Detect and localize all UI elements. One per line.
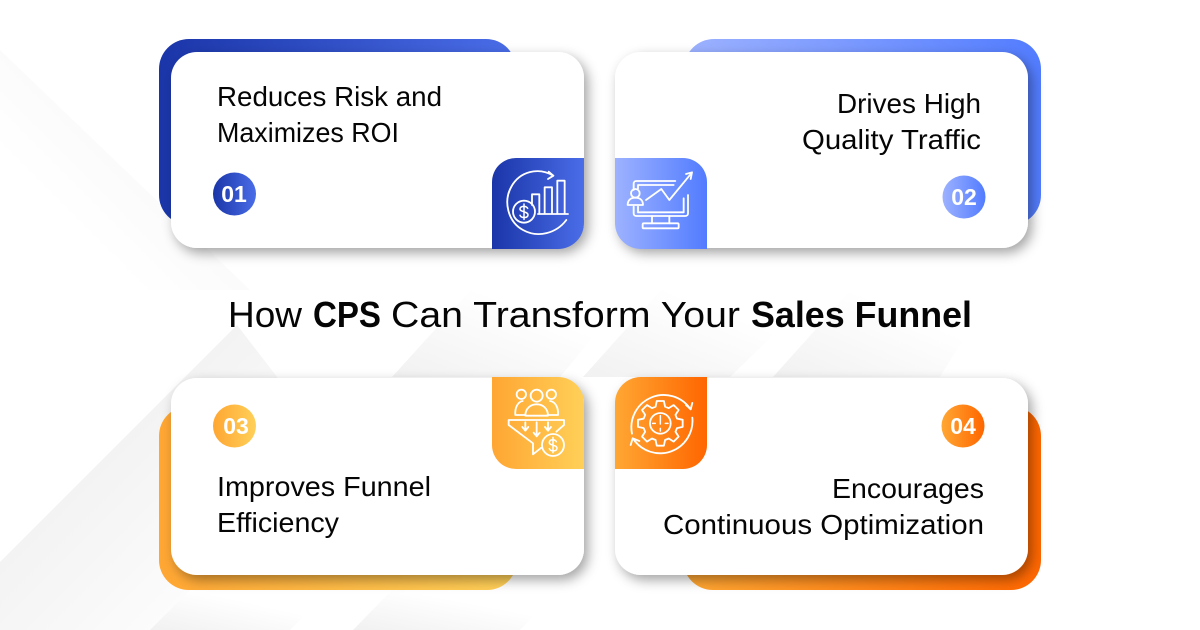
title: How xyxy=(228,294,303,335)
number badge 01: 01 xyxy=(221,181,247,207)
card 01 white panel xyxy=(171,52,584,248)
heading: card 01: Reduces Risk and xyxy=(217,81,442,112)
panel: card 02 high quality traffic xyxy=(615,39,1041,249)
icon: people entering funnel xyxy=(509,390,564,456)
heading: card 04 xyxy=(663,473,984,540)
heading: card 01: Maximizes ROI xyxy=(217,117,399,148)
card 02 backing shape xyxy=(684,39,1041,225)
title xyxy=(228,294,972,335)
heading: card 04: Continuous Optimization xyxy=(663,509,984,540)
number badge 03: 03 xyxy=(223,413,249,439)
card 02 icon tile xyxy=(615,158,707,249)
number badge 02: 02 xyxy=(951,184,977,210)
card 04 backing shape xyxy=(683,406,1041,590)
heading: card 04: Encourages xyxy=(832,473,984,504)
heading: card 03 xyxy=(217,471,431,538)
card 03 icon tile xyxy=(492,377,584,469)
card 01 backing shape xyxy=(159,39,516,225)
number badge 02 xyxy=(942,176,986,218)
title: CPS xyxy=(313,294,381,335)
panel: card 03 funnel efficiency xyxy=(159,377,584,590)
card 04 icon tile xyxy=(615,377,707,469)
heading: card 02: Quality Traffic xyxy=(802,124,981,155)
card 01 icon tile xyxy=(492,158,584,249)
number badge 03 xyxy=(213,404,256,448)
card 02 white panel xyxy=(615,52,1028,248)
icon: monitor with rising line xyxy=(628,172,692,228)
card 03 white panel xyxy=(171,378,584,575)
icon: gear with clock and cycle arrows xyxy=(631,395,692,453)
heading: card 03: Efficiency xyxy=(217,507,339,538)
title: Sales Funnel xyxy=(751,294,972,335)
icon: coin and growth bars xyxy=(507,171,568,234)
card 04 white panel xyxy=(615,378,1028,575)
panel: card 04 continuous optimization xyxy=(615,377,1041,590)
number badge 04 xyxy=(942,404,984,448)
number badge 04: 04 xyxy=(950,413,976,439)
heading: card 02: Drives High xyxy=(837,88,981,119)
title: Can Transform Your xyxy=(391,294,740,335)
panel: card 01 reduces risk xyxy=(159,39,584,249)
number badge 01 xyxy=(213,172,256,216)
heading: card 02 xyxy=(802,88,981,155)
heading: card 03: Improves Funnel xyxy=(217,471,431,502)
heading: card 01 xyxy=(217,81,442,148)
card 03 backing shape xyxy=(159,406,517,590)
